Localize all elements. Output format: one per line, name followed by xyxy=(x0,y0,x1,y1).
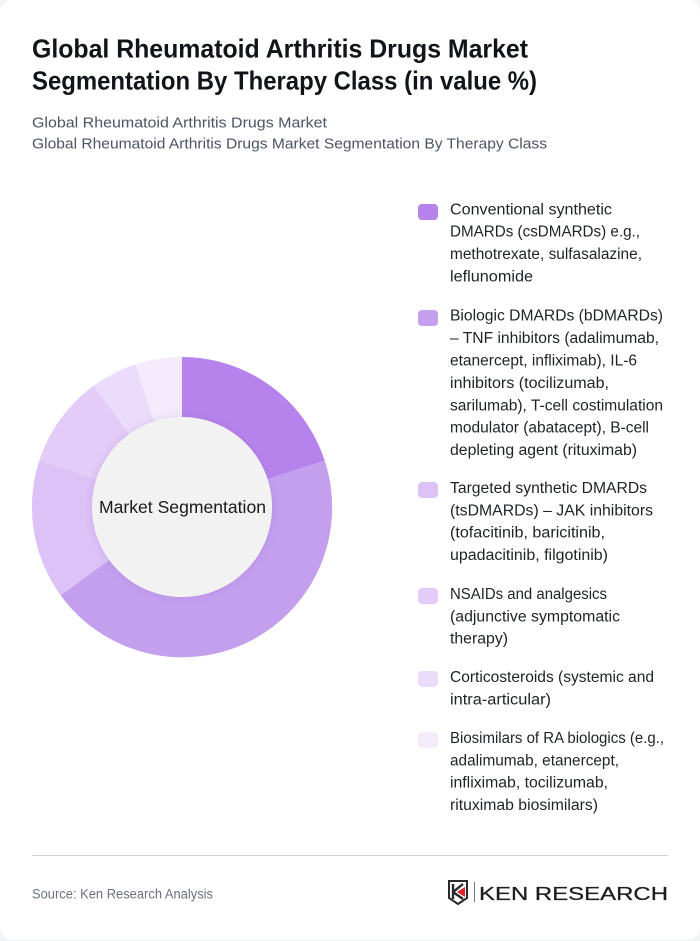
legend item: csDMARDs: methotrexate, sulfasalazine, xyxy=(450,246,642,263)
legend item: NSAIDs: (adjunctive symptomatic xyxy=(450,608,620,625)
legend item: bDMARDs: etanercept, infliximab), IL-6 xyxy=(450,352,637,370)
slice: NSAIDs 10% xyxy=(39,386,129,479)
logo icon: shield xyxy=(449,881,467,904)
legend item: corticosteroids xyxy=(418,669,654,708)
legend item: tsDMARDs: (tofacitinib, baricitinib, xyxy=(450,525,605,542)
title: Global Rheumatoid Arthritis Drugs Market xyxy=(32,34,528,64)
source note: Source: Ken Research Analysis xyxy=(32,886,213,902)
legend item: corticosteroids: intra-articular) xyxy=(450,691,551,708)
slice: biosimilars 5% xyxy=(136,357,182,421)
legend item: tsDMARDs: (tsDMARDs) – JAK inhibitors xyxy=(450,502,653,520)
legend item: biosimilars: rituximab biosimilars) xyxy=(450,797,598,814)
slice: bDMARDs 45% xyxy=(61,461,332,657)
legend item: bDMARDs: inhibitors (tocilizumab, xyxy=(450,375,609,392)
subtitle: Global Rheumatoid Arthritis Drugs Market xyxy=(32,114,328,131)
legend item: tsDMARDs: upadacitinib, filgotinib) xyxy=(450,547,608,564)
subtitle: Global Rheumatoid Arthritis Drugs Market Segmentation By Therapy Class xyxy=(32,135,547,152)
logo: Ken Research xyxy=(449,881,668,904)
subtitle xyxy=(32,114,547,152)
legend item: bDMARDs xyxy=(418,308,663,459)
legend item: biosimilars xyxy=(418,730,664,814)
legend item: NSAIDs: NSAIDs and analgesics xyxy=(450,586,607,603)
legend item: csDMARDs: DMARDs (csDMARDs) e.g., xyxy=(450,224,640,241)
legend item: csDMARDs: leflunomide xyxy=(450,269,533,286)
legend item: biosimilars: infliximab, tocilizumab, xyxy=(450,775,608,792)
legend xyxy=(418,202,664,814)
legend item: bDMARDs: modulator (abatacept), B-cell xyxy=(450,420,649,437)
legend item: csDMARDs xyxy=(418,202,642,286)
legend item: biosimilars: Biosimilars of RA biologics (e.g., xyxy=(450,730,664,747)
slice: corticosteroids 5% xyxy=(94,364,154,434)
legend item: bDMARDs: – TNF inhibitors (adalimumab, xyxy=(450,330,659,347)
legend item: bDMARDs: sarilumab), T-cell costimulation xyxy=(450,397,663,414)
donut centre label: Market Segmentation xyxy=(99,497,266,517)
slice: tsDMARDs 15% xyxy=(32,461,109,595)
donut hole xyxy=(92,417,272,597)
donut hole shadow xyxy=(91,416,273,598)
legend item: NSAIDs xyxy=(418,586,620,648)
legend item: tsDMARDs: Targeted synthetic DMARDs xyxy=(450,480,647,497)
title xyxy=(32,34,537,96)
legend item: biosimilars: adalimumab, etanercept, xyxy=(450,752,619,769)
legend item: csDMARDs: Conventional synthetic xyxy=(450,202,612,218)
legend item: NSAIDs: therapy) xyxy=(450,631,508,648)
legend item: corticosteroids: Corticosteroids (systemic and xyxy=(450,669,654,686)
logo wordmark: KEN RESEARCH xyxy=(479,884,668,904)
legend item: bDMARDs: depleting agent (rituximab) xyxy=(450,442,637,459)
legend item: bDMARDs: Biologic DMARDs (bDMARDs) xyxy=(450,308,663,325)
title: Segmentation By Therapy Class (in value %) xyxy=(32,66,537,96)
donut chart xyxy=(32,357,332,657)
legend item: tsDMARDs xyxy=(418,480,653,564)
slice: csDMARDs 20% xyxy=(182,357,325,479)
